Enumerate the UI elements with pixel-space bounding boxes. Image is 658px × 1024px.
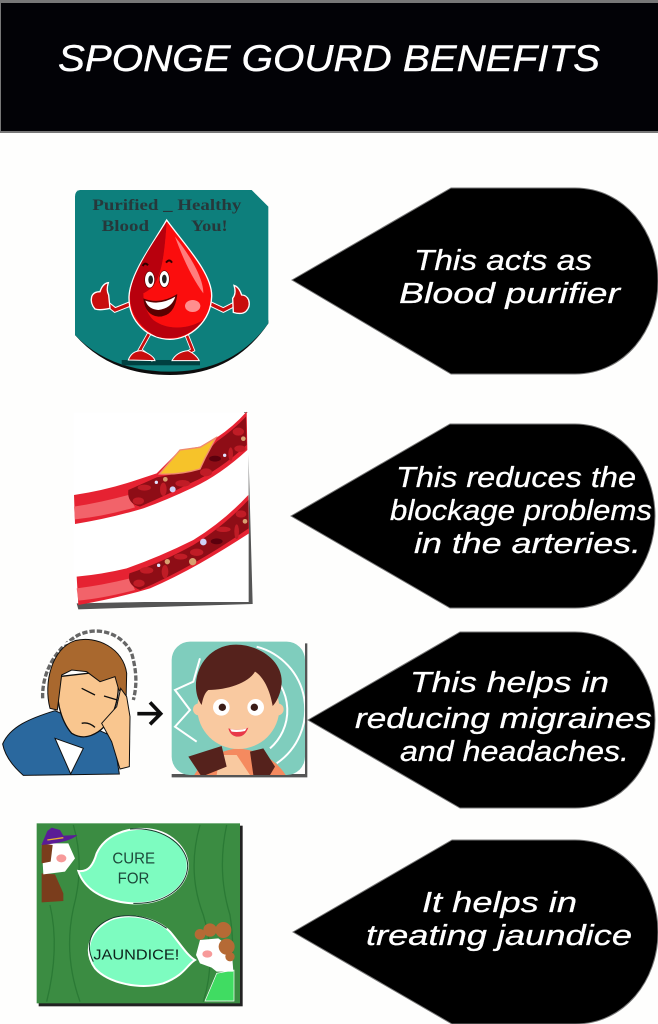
callout text: in the arteries.	[414, 528, 641, 560]
arrow callout: migraines	[308, 632, 655, 808]
artery with plaque	[74, 412, 247, 524]
callout text: and headaches.	[400, 736, 629, 768]
badge caption: You!	[191, 218, 228, 235]
illustration: jaundice conversation panel	[37, 823, 243, 1006]
speech bubble: cure for: CURE	[112, 850, 155, 867]
callout text: Blood purifier	[399, 278, 622, 310]
speech bubble: jaundice: JAUNDICE!	[93, 948, 179, 964]
speech bubble: cure for	[78, 829, 188, 903]
callout text: This helps in	[410, 667, 609, 699]
man in purple hat	[42, 828, 77, 902]
illustration: happy blood drop badge	[75, 190, 268, 375]
speech bubble: jaundice	[89, 916, 195, 986]
arrow callout: blood purifier	[292, 188, 658, 374]
callout text: This acts as	[414, 245, 592, 277]
callout text: It helps in	[422, 887, 577, 919]
callout text: This reduces the	[396, 462, 636, 494]
callout text: treating jaundice	[366, 920, 632, 952]
callout text	[399, 245, 622, 310]
callout text: reducing migraines	[355, 703, 652, 735]
woman with curly hair	[195, 922, 235, 1001]
badge caption: Purified _ Healthy	[92, 197, 241, 214]
relieved woman app icon	[172, 642, 307, 777]
title banner	[0, 0, 658, 133]
man with headache	[3, 631, 136, 775]
illustration: man with headache, arrow, relieved woman	[3, 631, 307, 777]
illustration: artery blockage panel	[73, 412, 253, 609]
callout text	[390, 462, 652, 560]
arrow callout: jaundice	[293, 840, 658, 1024]
arrow	[137, 702, 161, 724]
badge caption	[92, 197, 241, 235]
arrow callout: artery blockage	[291, 424, 655, 608]
title: SPONGE GOURD BENEFITS	[58, 38, 600, 79]
badge caption: Blood	[102, 218, 149, 235]
callout text	[366, 887, 632, 952]
icon: blood drop character	[91, 220, 249, 361]
speech bubble: cure for: FOR	[118, 870, 149, 887]
callout text: blockage problems	[390, 495, 652, 527]
callout text	[355, 667, 652, 768]
healthy artery	[77, 495, 249, 605]
